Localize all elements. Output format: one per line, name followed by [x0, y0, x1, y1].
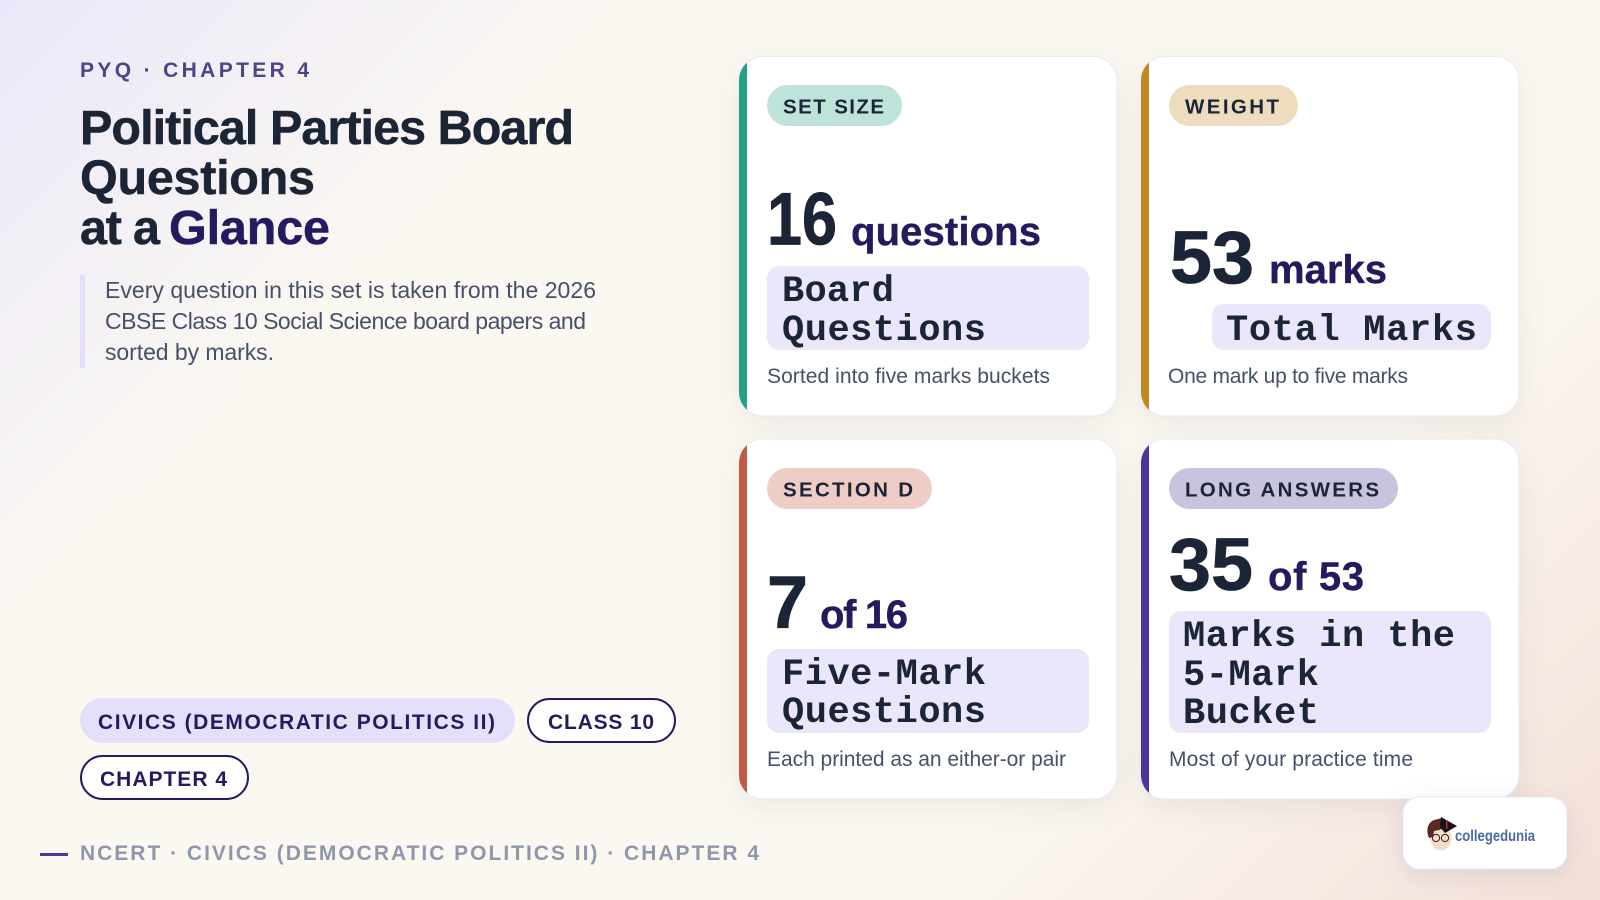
tag: class 10: [528, 699, 675, 742]
stat: 16 questions: 16: [767, 178, 837, 260]
tag: chapter 4: [81, 756, 248, 799]
panel: long answers: [1141, 439, 1519, 799]
stat: 7 of 16: [767, 561, 908, 644]
pill: set size: SET SIZE: [783, 96, 884, 118]
pill: weight: WEIGHT: [1185, 96, 1279, 118]
stat: 53 marks: [1170, 216, 1387, 299]
stat: 35 of 53: 35: [1169, 523, 1253, 606]
note: Each printed as an either-or pair: [767, 748, 1066, 771]
label: total marks: Total Marks: [1226, 310, 1477, 352]
pill: set size: [767, 85, 902, 126]
pill: section D: [767, 468, 932, 509]
stat: 35 of 53: [1169, 523, 1364, 606]
title: [80, 101, 574, 255]
tag: chapter 4: CHAPTER 4: [100, 768, 227, 791]
logo wordmark: collegedunia: [1455, 828, 1535, 845]
note: Most of your practice time: [1169, 748, 1413, 771]
label: board questions: [767, 266, 1089, 352]
note: Sorted into five marks buckets: [767, 365, 1050, 388]
title: Glance: [169, 201, 330, 255]
label: marks in the 5-mark bucket: Bucket: [1183, 693, 1319, 735]
label: five-mark questions: Questions: [782, 692, 986, 734]
pill: long answers: LONG ANSWERS: [1185, 478, 1379, 502]
label: marks in the 5-mark bucket: 5-Mark: [1183, 655, 1319, 697]
tag: class 10: CLASS 10: [548, 711, 654, 734]
stat: 7 of 16: 7: [767, 561, 808, 644]
label: board questions: Board: [782, 271, 894, 313]
title: Questions: [80, 151, 315, 205]
label: five-mark questions: [767, 649, 1089, 734]
tags: [80, 698, 675, 799]
label: marks in the 5-mark bucket: Marks in the: [1183, 616, 1455, 658]
stat: 16 questions: [767, 178, 1041, 260]
stat: 53 marks: marks: [1269, 248, 1387, 292]
note: One mark up to five marks: [1168, 365, 1408, 388]
panel: section D: [739, 439, 1117, 799]
pill: weight: [1169, 85, 1298, 126]
intro text block with accent bar: CBSE Class 10 Social Science board papers and: [105, 308, 586, 334]
intro text block with accent bar: Every question in this set is taken from the 2026: [105, 277, 596, 303]
stat: 16 questions: questions: [851, 210, 1041, 254]
pill: long answers: [1169, 468, 1398, 509]
title: Political Parties Board: [80, 101, 574, 155]
eyebrow: PYQ chapter 4: PYQ · CHAPTER 4: [80, 59, 309, 82]
label: five-mark questions: Five-Mark: [782, 654, 986, 696]
stat: 53 marks: 53: [1170, 216, 1254, 299]
icon: graduate head: [1427, 817, 1457, 850]
title: at a: [80, 201, 161, 255]
stat: 7 of 16: of 16: [820, 593, 908, 637]
logo card: [1403, 797, 1567, 869]
panel: weight: [1141, 56, 1519, 416]
intro text block with accent bar: sorted by marks.: [105, 339, 274, 365]
pill: section D: SECTION D: [783, 478, 913, 502]
label: board questions: Questions: [782, 310, 986, 352]
intro text block with accent bar: [80, 275, 596, 368]
tag: civics: [80, 698, 515, 743]
label: marks in the 5-mark bucket: [1169, 611, 1491, 735]
panel: set size: [739, 56, 1117, 416]
tag: civics: CIVICS (DEMOCRATIC POLITICS II): [98, 711, 495, 734]
stat: 35 of 53: of 53: [1268, 555, 1364, 599]
footer line and source: NCERT · CIVICS (DEMOCRATIC POLITICS II) · CHAPTER 4: [80, 842, 759, 865]
